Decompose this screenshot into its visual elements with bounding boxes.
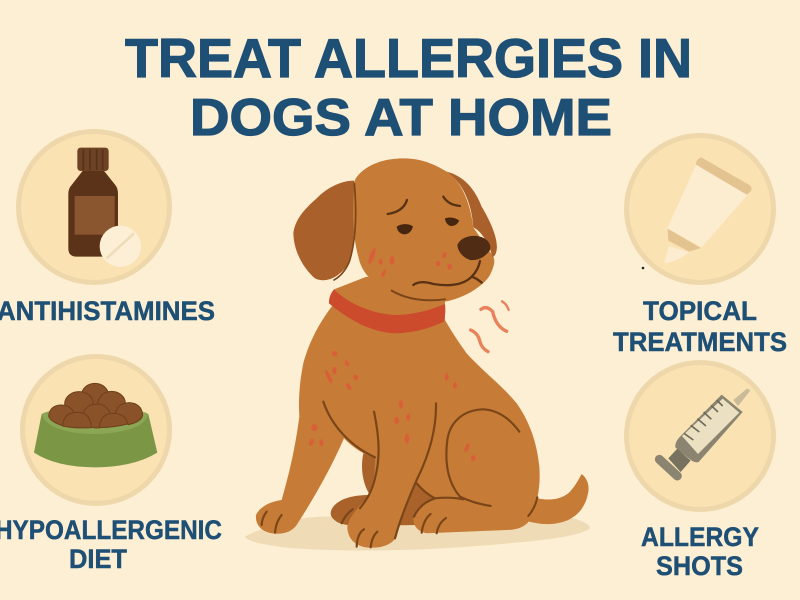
eyebrows bbox=[388, 197, 460, 214]
ground shadow bbox=[245, 517, 590, 551]
label: topical treatments: TREATMENTS bbox=[613, 327, 787, 357]
panel: topical treatments bbox=[613, 136, 787, 357]
face lines bbox=[334, 183, 445, 300]
itch marks bbox=[471, 301, 509, 352]
eyes bbox=[397, 217, 459, 234]
label: topical treatments bbox=[613, 296, 787, 357]
neck fill bbox=[332, 277, 445, 322]
body fold lines bbox=[262, 402, 537, 547]
panel: allergy shots bbox=[626, 362, 774, 581]
head bbox=[353, 158, 494, 302]
title: DOGS AT HOME bbox=[190, 89, 612, 147]
label: topical treatments: TOPICAL bbox=[643, 296, 757, 326]
tail bbox=[523, 474, 589, 524]
label: hypoallergenic diet bbox=[0, 515, 222, 574]
label: antihistamines: ANTIHISTAMINES bbox=[0, 296, 215, 326]
panel: antihistamines bbox=[0, 132, 215, 326]
rear legs, dark bbox=[331, 453, 440, 526]
collar bbox=[329, 289, 445, 333]
mouth bbox=[413, 261, 482, 285]
icon: syringe bbox=[626, 362, 774, 510]
body bbox=[256, 307, 540, 548]
panel: hypoallergenic diet bbox=[0, 356, 222, 574]
icon: medicine bottle and pill bbox=[18, 132, 170, 282]
label: allergy shots: ALLERGY bbox=[641, 522, 759, 552]
label: allergy shots bbox=[641, 522, 759, 581]
speck bbox=[642, 267, 644, 269]
illustration: itchy dog bbox=[245, 158, 590, 551]
title bbox=[125, 27, 692, 147]
nose bbox=[457, 236, 490, 260]
label: hypoallergenic diet: HYPOALLERGENIC bbox=[0, 515, 222, 545]
right ear bbox=[447, 172, 497, 257]
icon: food bowl bbox=[22, 356, 170, 504]
left ear bbox=[293, 181, 355, 280]
irritated skin spots bbox=[308, 247, 476, 461]
label: hypoallergenic diet: DIET bbox=[69, 544, 127, 574]
title: TREAT ALLERGIES IN bbox=[125, 27, 692, 89]
icon: ointment tube bbox=[626, 136, 774, 282]
label: allergy shots: SHOTS bbox=[656, 551, 743, 581]
